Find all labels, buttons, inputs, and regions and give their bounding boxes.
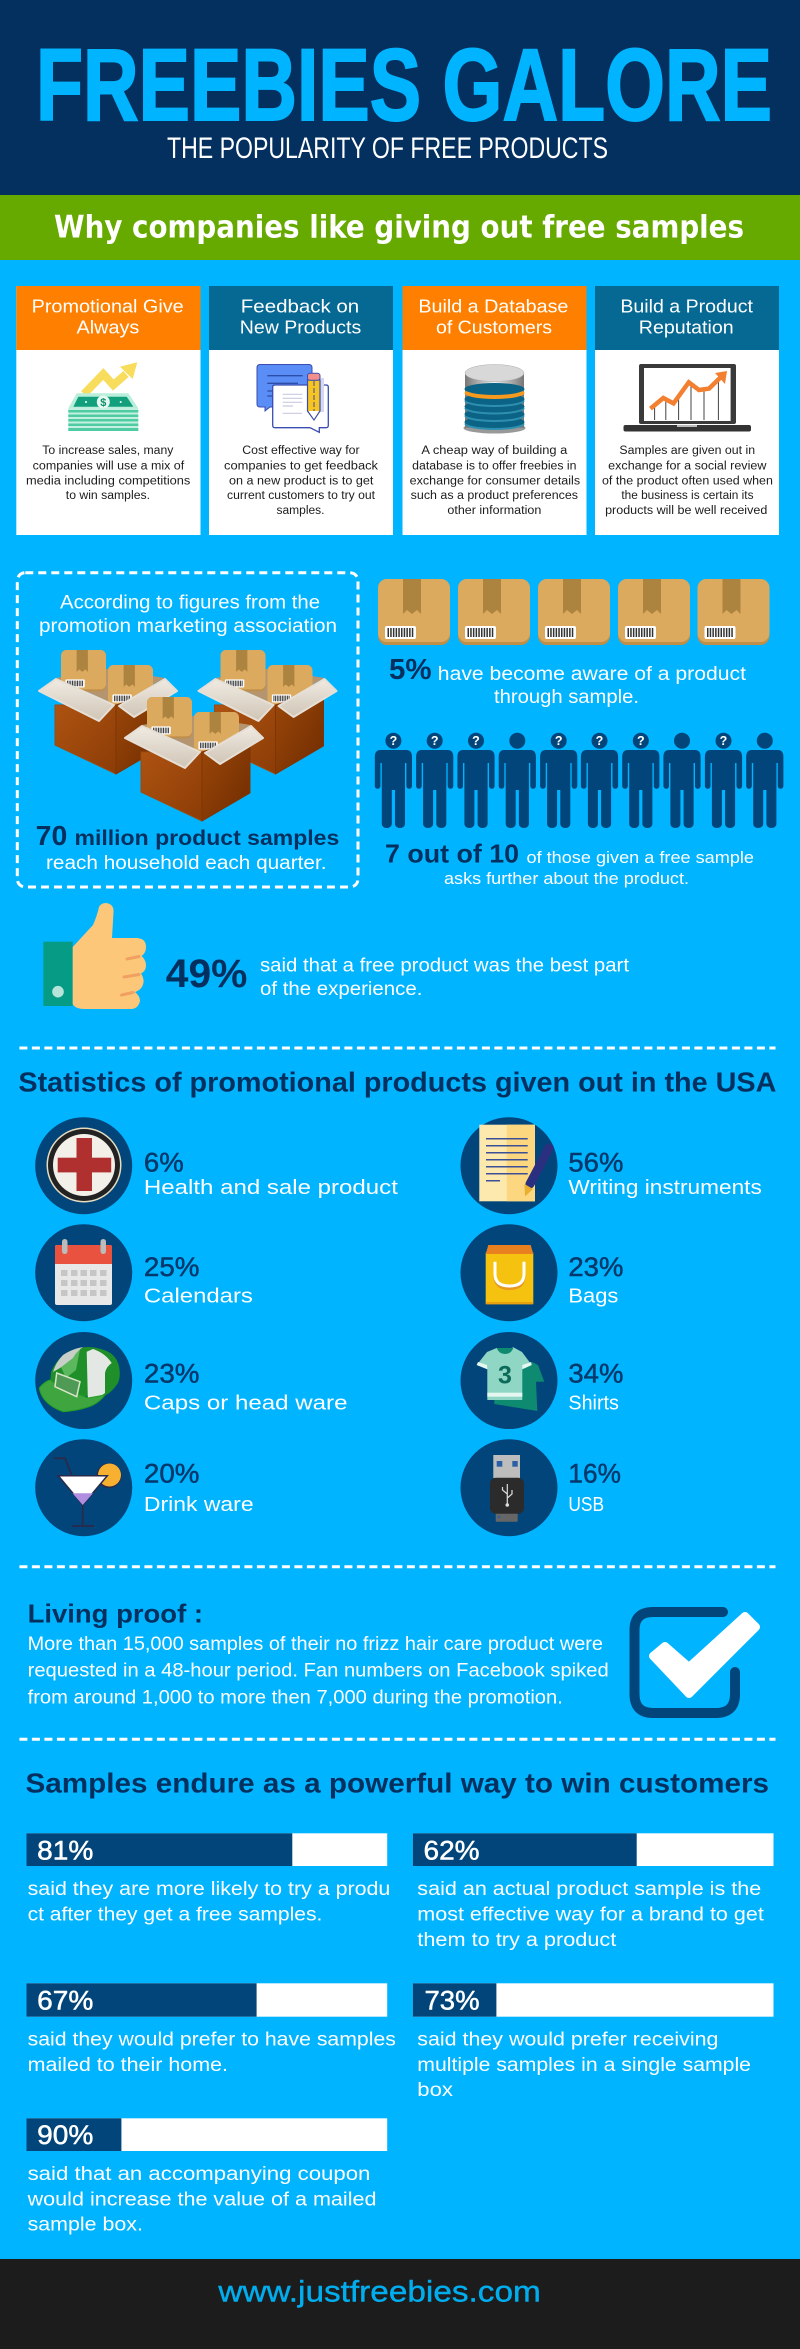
card text: of the product often used when xyxy=(602,475,773,487)
stat: 70 million: reach household each quarter. xyxy=(46,853,326,874)
panel: build a product reputation xyxy=(595,286,779,535)
card heading: New Products xyxy=(240,318,361,338)
pictogram: 10 people: ? xyxy=(555,734,563,748)
stat: 7 out of 10 xyxy=(385,839,754,888)
card heading: of Customers xyxy=(436,318,552,338)
pictogram: 10 people xyxy=(375,733,783,828)
card text: on a new product is to get xyxy=(229,475,374,487)
stat: drink ware: Drink ware xyxy=(144,1493,254,1516)
icon: t-shirt xyxy=(460,1332,558,1429)
icon: thumbs up xyxy=(43,903,146,1009)
stat: 49 percent: of the experience. xyxy=(260,979,422,1000)
stat: calendars: 25% xyxy=(144,1252,200,1282)
card text: companies will use a mix of xyxy=(33,460,185,472)
card text: Samples are given out in xyxy=(619,445,755,457)
header band xyxy=(0,0,800,195)
intro text: According to figures from the xyxy=(60,593,320,614)
stat bar: 81 percent: said they are more likely to try a produ xyxy=(28,1879,390,1900)
stat: usb xyxy=(460,1439,621,1536)
stat bar: 90 percent: would increase the value of a mailed xyxy=(26,2190,377,2211)
stat bar: 90 percent: said that an accompanying coupon xyxy=(28,2164,370,2185)
stat: caps: 23% xyxy=(144,1359,200,1389)
stat bar: 67 percent: mailed to their home. xyxy=(28,2055,228,2076)
stat bar: 81 percent: 81% xyxy=(37,1835,93,1865)
icon: laptop with growth chart xyxy=(624,364,751,432)
stat: bags: Bags xyxy=(568,1284,618,1307)
subtitle: THE POPULARITY OF FREE PRODUCTS xyxy=(167,132,608,165)
stat: shirts: Shirts xyxy=(568,1391,619,1414)
icon: usb stick xyxy=(460,1439,558,1536)
pictogram: 10 people: ? xyxy=(472,734,480,748)
pictogram: 10 people: ? xyxy=(596,734,603,748)
stat: 70 million: 70 xyxy=(36,820,67,851)
stat: writing instruments: Writing instruments xyxy=(568,1176,762,1199)
icon: shopping bag xyxy=(460,1224,558,1321)
card text: exchange for a social review xyxy=(608,460,767,472)
panel: feedback on new products xyxy=(209,286,393,535)
text block: living proof xyxy=(28,1599,609,1708)
card heading xyxy=(240,296,361,338)
icon: cocktail xyxy=(35,1439,132,1536)
stat: health: 6% xyxy=(144,1148,184,1178)
icon: check mark box xyxy=(634,1612,756,1713)
stat bar: 62 percent: 62% xyxy=(424,1835,480,1865)
card text: to win samples. xyxy=(66,490,150,502)
card text: such as a product preferences xyxy=(411,490,578,502)
footer: www.justfreebies.com xyxy=(217,2276,541,2309)
pictogram: 10 people: ? xyxy=(390,734,397,748)
icon: money with rising arrow xyxy=(68,362,138,431)
heading: statistics: Statistics of promotional products given out in the USA xyxy=(18,1067,777,1098)
stat: health xyxy=(35,1117,398,1214)
icon: paper and pen xyxy=(460,1117,558,1214)
icon: t-shirt: 3 xyxy=(498,1361,512,1389)
card text: current customers to try out xyxy=(227,490,376,502)
icon: green cap xyxy=(35,1332,132,1429)
pictogram: 10 people: ? xyxy=(637,734,645,748)
stat bar: 67 percent xyxy=(26,1983,396,2076)
stat: 70 million: million product samples xyxy=(74,827,339,850)
stat bar: 73 percent: multiple samples in a single sample xyxy=(417,2055,751,2076)
card text xyxy=(602,445,773,517)
text block: living proof: requested in a 48-hour period. Fan numbers on Facebook spiked xyxy=(28,1661,609,1682)
card text: database is to offer freebies in xyxy=(412,460,576,472)
panel: promotional give always xyxy=(16,286,200,535)
stat: usb: USB xyxy=(568,1493,604,1516)
stat: drink ware: 20% xyxy=(144,1459,200,1489)
pictogram: 10 people: ? xyxy=(431,734,439,748)
text block: living proof: from around 1,000 to more then 7,000 during the promotion. xyxy=(28,1687,563,1708)
text block: living proof: More than 15,000 samples of their no frizz hair care product were xyxy=(28,1634,603,1655)
card text: To increase sales, many xyxy=(42,445,174,457)
card text xyxy=(26,445,191,502)
stat bar: 90 percent: sample box. xyxy=(28,2215,143,2236)
card heading: Promotional Give xyxy=(32,296,184,316)
stat bar: 81 percent: ct after they get a free samples. xyxy=(28,1905,322,1926)
card heading: Build a Product xyxy=(620,296,753,316)
card text: other information xyxy=(447,505,541,517)
stat: shirts: 34% xyxy=(568,1359,623,1389)
stat bar: 90 percent xyxy=(26,2118,387,2236)
stat: 7 out of 10: asks further about the product. xyxy=(444,869,689,888)
green section heading xyxy=(0,195,800,260)
stat: usb: 16% xyxy=(568,1459,621,1489)
stat: 5 percent xyxy=(389,654,747,708)
card text: products will be well received xyxy=(605,505,767,517)
stat bar: 67 percent: said they would prefer to have samples xyxy=(28,2030,396,2051)
stat: 5 percent: 5% xyxy=(389,654,432,686)
card text: Cost effective way for xyxy=(242,445,360,457)
stat bar: 81 percent xyxy=(26,1833,390,1926)
intro text xyxy=(39,593,337,637)
intro text: promotion marketing association xyxy=(39,616,337,637)
stat: 70 million xyxy=(36,820,339,874)
stat bar: 73 percent: box xyxy=(417,2080,454,2101)
stat: bags: 23% xyxy=(568,1252,623,1282)
stat: calendars xyxy=(35,1224,253,1321)
stat: 5 percent: through sample. xyxy=(494,687,639,708)
stat: writing instruments: 56% xyxy=(568,1148,623,1178)
stat: writing instruments xyxy=(460,1117,762,1214)
card text: A cheap way of building a xyxy=(421,445,568,457)
footer xyxy=(0,2259,800,2349)
stat: shirts xyxy=(460,1332,623,1429)
card heading: Feedback on xyxy=(241,296,359,316)
card text: media including competitions xyxy=(26,475,191,487)
stat: health: Health and sale product xyxy=(144,1176,398,1199)
icon: database cylinder xyxy=(464,364,526,434)
icon: red cross xyxy=(35,1117,132,1214)
stat bar: 90 percent: 90% xyxy=(37,2120,93,2150)
stat bar: 62 percent xyxy=(413,1833,774,1951)
stat bar: 73 percent: 73% xyxy=(424,1985,480,2015)
icon: open boxes with samples xyxy=(39,650,336,821)
stat: calendars: Calendars xyxy=(144,1284,253,1307)
card text: companies to get feedback xyxy=(224,460,378,472)
card heading xyxy=(32,296,184,338)
card text xyxy=(410,445,580,517)
stat bar: 62 percent: them to try a product xyxy=(417,1930,617,1951)
icon: money with rising arrow: $ xyxy=(100,397,106,409)
stat: 49 percent: 49% xyxy=(166,952,247,996)
stat bar: 73 percent: said they would prefer receiving xyxy=(417,2030,718,2051)
card heading: Build a Database xyxy=(418,296,568,316)
stat bar: 62 percent: most effective way for a brand to get xyxy=(417,1905,765,1926)
stat: caps: Caps or head ware xyxy=(144,1391,348,1414)
stat: drink ware xyxy=(35,1439,254,1536)
stat bar: 62 percent: said an actual product sample is the xyxy=(417,1879,761,1900)
stat: bags xyxy=(460,1224,623,1321)
stat: 7 out of 10: 7 out of 10 xyxy=(385,839,519,869)
card heading xyxy=(418,296,568,338)
icon row: five cardboard boxes xyxy=(378,579,770,645)
text block: living proof: Living proof : xyxy=(28,1599,203,1629)
card text: samples. xyxy=(276,505,324,517)
card heading xyxy=(620,296,753,338)
card text: exchange for consumer details xyxy=(410,475,580,487)
card text xyxy=(224,445,378,517)
stat: caps xyxy=(35,1332,347,1429)
icon: calendar xyxy=(35,1224,132,1321)
stat bar: 73 percent xyxy=(413,1983,774,2101)
heading: samples endure: Samples endure as a powerful way to win customers xyxy=(26,1768,769,1799)
stat: 49 percent: said that a free product was the best part xyxy=(260,956,630,977)
icon: speech documents and pencil xyxy=(257,364,328,432)
stat: 5 percent: have become aware of a product xyxy=(438,664,747,685)
stat: 49 percent xyxy=(166,952,630,1000)
panel: promotion marketing association callout xyxy=(17,573,358,887)
card text: the business is certain its xyxy=(621,490,754,502)
card heading: Reputation xyxy=(639,318,734,338)
panel: build a database xyxy=(402,286,586,535)
card heading: Always xyxy=(76,318,139,338)
stat: 7 out of 10: of those given a free sample xyxy=(526,848,754,867)
pictogram: 10 people: ? xyxy=(720,734,727,748)
stat bar: 67 percent: 67% xyxy=(37,1985,93,2015)
